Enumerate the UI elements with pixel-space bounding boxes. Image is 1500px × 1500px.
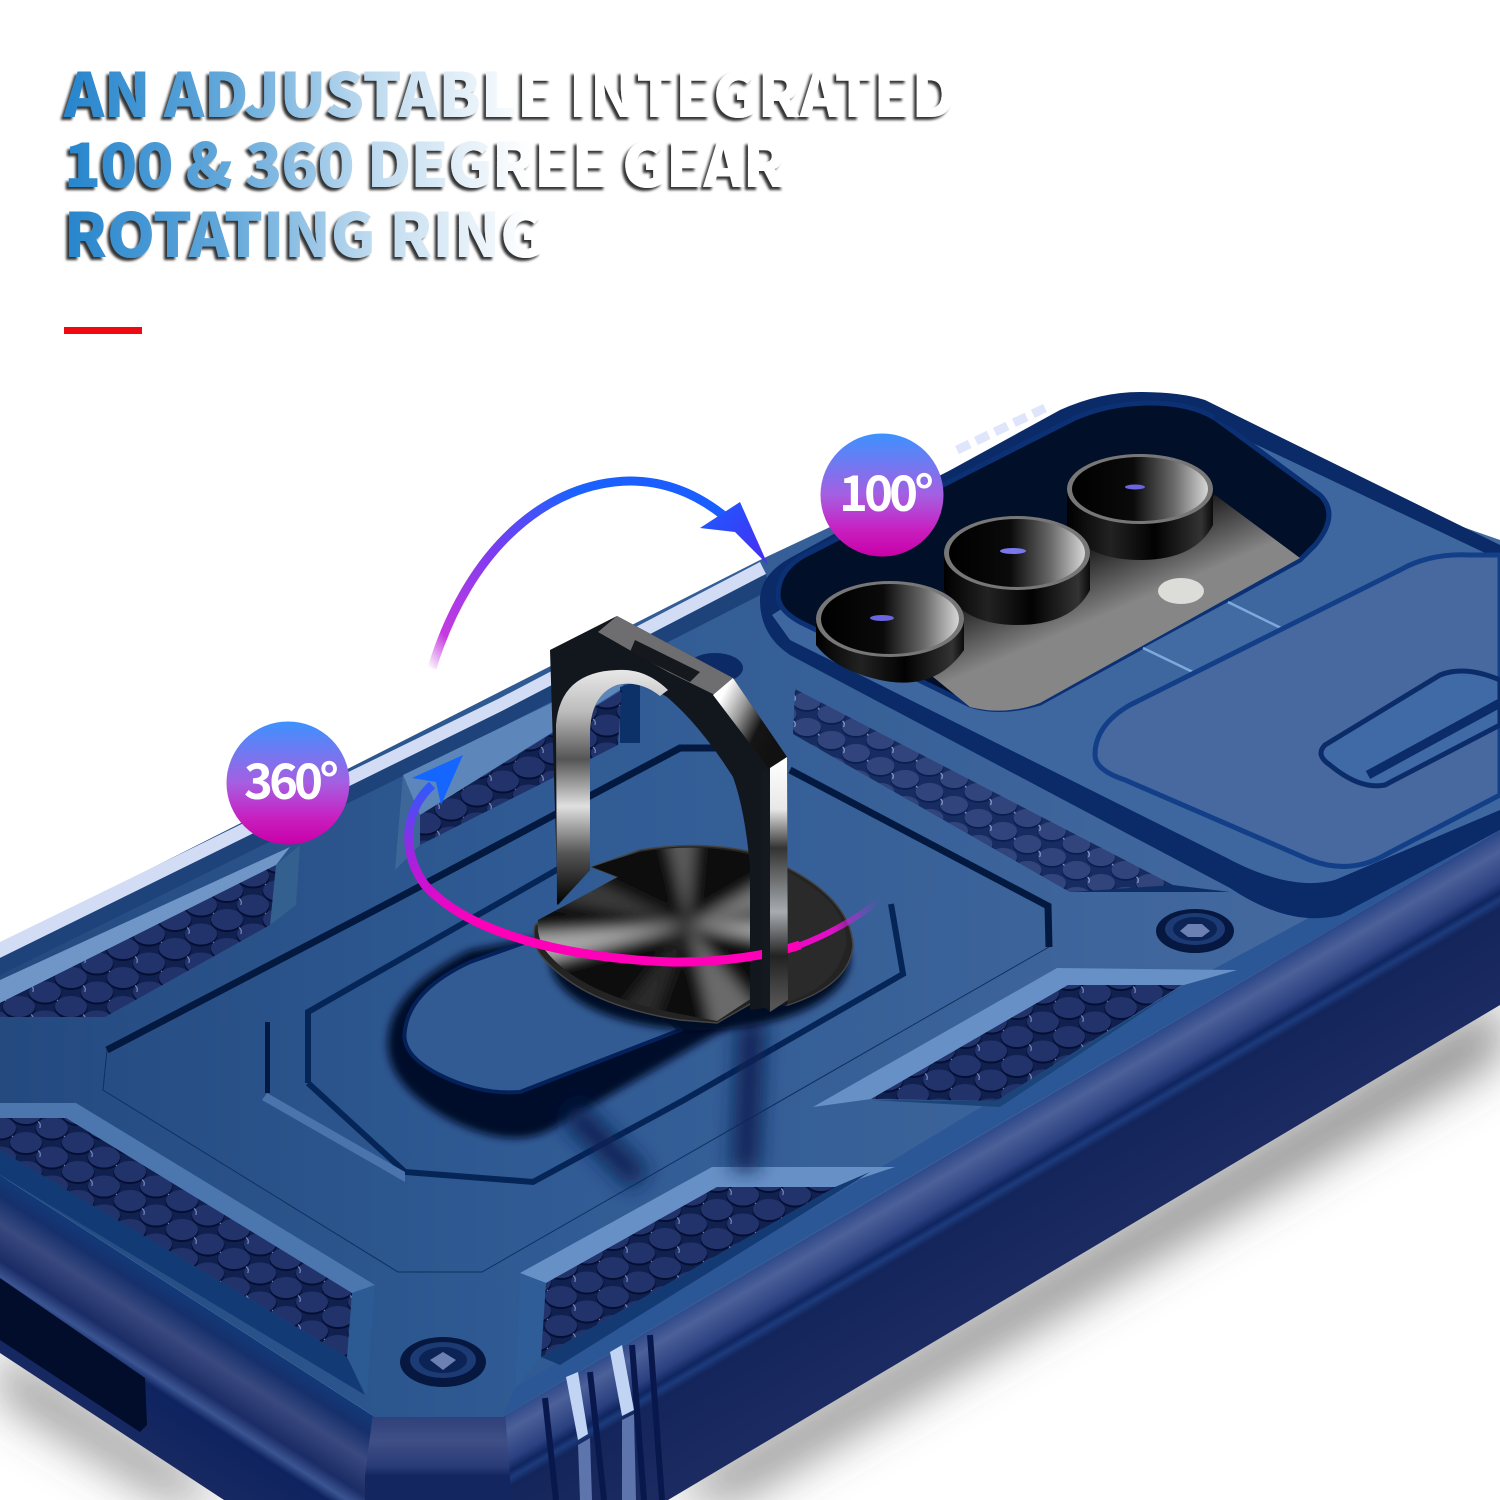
disc rim [534, 845, 853, 1023]
lower left inner rim [0, 1150, 365, 1395]
facet highlight [713, 678, 787, 770]
disc base shadow [550, 890, 850, 1030]
badge: 100 degrees [820, 434, 944, 556]
title [63, 46, 956, 275]
phone case body [0, 392, 1500, 1500]
arrow: 360 degree rotation [409, 755, 880, 962]
disc right segment [788, 872, 846, 1002]
phone drop shadow [0, 1000, 1500, 1500]
camera slider cover [1095, 555, 1500, 866]
side wall right [503, 830, 1500, 1500]
grip panel: behind ring [395, 660, 640, 870]
inner hexagon bevel [262, 1093, 405, 1182]
back face [0, 400, 1500, 1417]
lens 2 [944, 516, 1090, 625]
charging port [0, 1278, 147, 1432]
arrow: 100 degree arc [432, 481, 768, 668]
top edge dark strip [0, 574, 770, 975]
module top surface [772, 418, 1500, 883]
title: 100 & 360 DEGREE GEAR [64, 116, 786, 205]
disc radial metal [538, 848, 750, 1021]
flash [1158, 578, 1204, 604]
tab [1143, 602, 1282, 674]
top right rim line [1215, 416, 1500, 556]
top edge highlight [0, 562, 766, 958]
badge: 360 degrees [226, 722, 350, 844]
screw: lower [400, 1337, 486, 1387]
short groove [265, 1022, 270, 1093]
inner hexagon groove [308, 868, 903, 1182]
recessed ring mount [388, 920, 740, 1138]
slider grip [1321, 671, 1500, 786]
corner bumper lower lip [365, 1476, 510, 1500]
top cap [598, 616, 733, 695]
left ring arm silver [556, 670, 668, 905]
ring shadow [570, 1020, 752, 1180]
ring stirrup body [550, 616, 787, 1010]
side buttons [957, 408, 1045, 450]
side stripes [545, 1335, 662, 1500]
title: ROTATING RING [64, 186, 545, 275]
screw: upper right [1156, 909, 1234, 953]
hexagon upper groove [107, 748, 1049, 1050]
lower right inner rim [503, 815, 1500, 1415]
top slot [630, 640, 700, 682]
right ring arm [762, 757, 788, 1012]
side wall left [0, 1175, 375, 1500]
lens window [778, 403, 1329, 710]
badge: 100 degrees: 100° [839, 455, 934, 526]
grip panel: lower left [0, 1103, 375, 1395]
corner bumper [365, 1412, 510, 1476]
title: AN ADJUSTABLE INTEGRATED [63, 46, 956, 135]
lens 3 [1067, 454, 1213, 560]
red accent line [64, 327, 142, 334]
screw: behind ring [687, 653, 743, 683]
badge: 360 degrees: 360° [244, 743, 339, 814]
grip panel: upper left [0, 845, 300, 1017]
camera module [760, 392, 1500, 918]
hexagon thin outline [103, 947, 1049, 1272]
grip panel: upper right [793, 689, 1230, 892]
grip panel: lower right [813, 968, 1237, 1107]
ring holder [533, 616, 856, 1035]
grip panel: lower middle [515, 1167, 895, 1388]
lens plate [900, 495, 1300, 711]
lens 1 [816, 581, 964, 683]
module rim [760, 392, 1500, 918]
